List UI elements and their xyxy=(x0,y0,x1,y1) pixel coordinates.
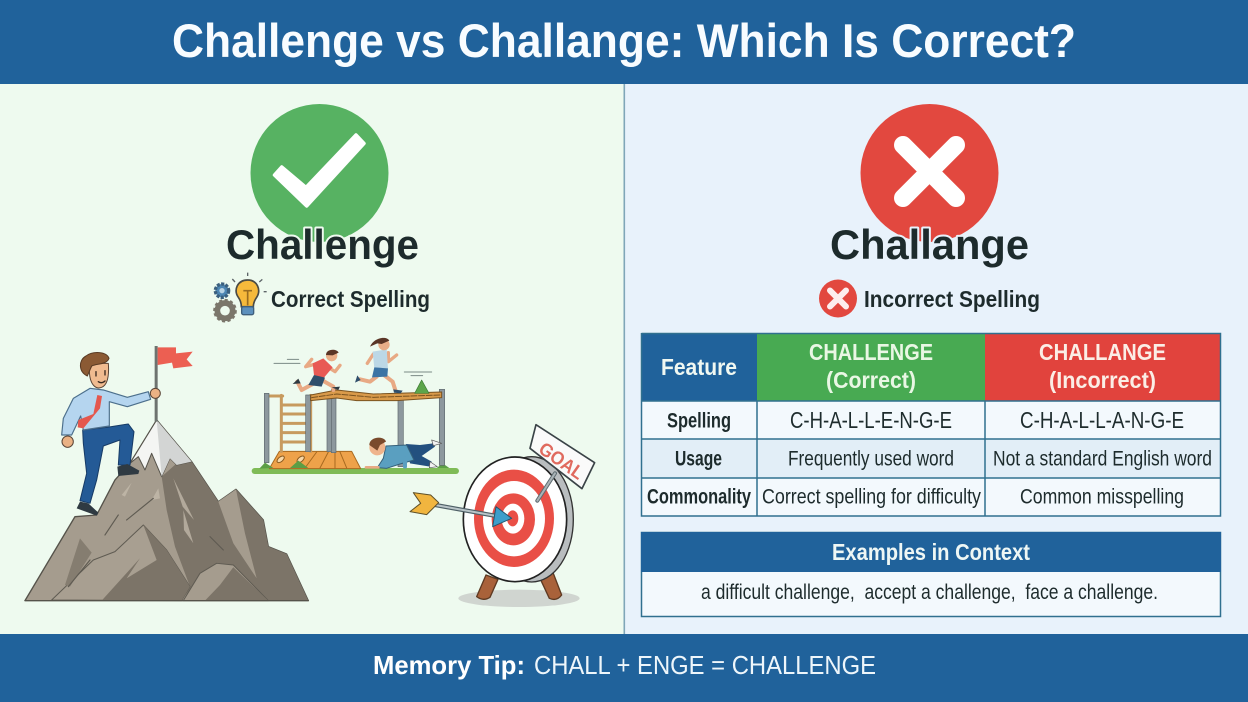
runner 2 xyxy=(355,338,403,393)
panel: examples in context xyxy=(641,532,1221,616)
table row: Spelling: C-H-A-L-L-E-N-G-E xyxy=(790,407,952,433)
table header: Challenge correct xyxy=(757,333,985,401)
target xyxy=(490,457,573,582)
head xyxy=(89,363,109,388)
ramp xyxy=(269,451,361,469)
ladder xyxy=(269,395,311,451)
flag xyxy=(155,346,193,422)
comparison table xyxy=(641,333,1220,516)
ground xyxy=(252,468,459,474)
table header: Challenge correct: CHALLENGE xyxy=(809,339,933,365)
panel: examples in context: Examples in Context xyxy=(832,539,1030,565)
table row: Commonality: Commonality xyxy=(647,486,751,508)
runner 1 xyxy=(293,350,340,390)
table header: Challange incorrect: CHALLANGE xyxy=(1039,339,1166,365)
table header: Challenge correct: (Correct) xyxy=(826,367,916,393)
crawling man xyxy=(366,438,442,468)
icon: red cross circle xyxy=(860,104,998,242)
table row: Usage: Frequently used word xyxy=(788,448,954,470)
trousers xyxy=(80,424,134,503)
illustration: obstacle course xyxy=(252,338,459,474)
goal sign xyxy=(530,425,595,489)
legs xyxy=(477,575,498,599)
shoes xyxy=(77,464,139,516)
illustration: mountain xyxy=(25,420,308,601)
table row: Spelling: Spelling xyxy=(667,410,731,432)
footer memory tip xyxy=(0,634,1248,702)
icon: gears and light bulb xyxy=(215,273,267,321)
panel: right incorrect background xyxy=(625,84,1248,634)
table row: Commonality: Common misspelling xyxy=(1020,486,1184,508)
arrow xyxy=(410,493,512,527)
heading: Challange: Challange xyxy=(830,221,1029,268)
label: Incorrect Spelling: Incorrect Spelling xyxy=(864,286,1040,312)
table row: Usage xyxy=(641,439,1220,478)
table row: Usage: Usage xyxy=(675,448,722,470)
panel: examples in context: a difficult challenge, accept a challenge, face a challenge. xyxy=(701,581,1158,604)
table row: Commonality: Correct spelling for difficulty xyxy=(762,486,981,508)
table header: Challange incorrect: (Incorrect) xyxy=(1049,367,1156,393)
hands xyxy=(62,388,160,447)
footer memory tip: Memory Tip: xyxy=(373,650,525,680)
heading: Challenge: Challenge xyxy=(226,221,419,268)
cone xyxy=(415,380,429,393)
icon: small red cross xyxy=(819,280,857,318)
table header: Feature xyxy=(641,333,757,401)
title banner xyxy=(0,0,1248,84)
illustration: target with arrow and goal sign xyxy=(410,425,595,607)
goal sign: GOAL xyxy=(535,438,588,484)
title banner: Challenge vs Challange: Which Is Correct? xyxy=(172,14,1076,67)
table row: Spelling xyxy=(641,401,1220,439)
tie xyxy=(78,395,102,428)
footer memory tip: CHALL + ENGE = CHALLENGE xyxy=(534,650,876,680)
table row: Commonality xyxy=(641,478,1220,516)
snow cap xyxy=(130,420,192,477)
panel: left correct background xyxy=(0,84,624,634)
table header: Feature: Feature xyxy=(661,354,737,380)
icon: green check circle xyxy=(250,104,388,242)
rope bridge xyxy=(311,390,442,401)
speed lines xyxy=(274,359,432,376)
shadow xyxy=(458,590,580,607)
shirt xyxy=(62,388,151,435)
table header: Challange incorrect xyxy=(985,333,1220,401)
table row: Spelling: C-H-A-L-L-A-N-G-E xyxy=(1020,407,1184,433)
illustration: man climbing with flag xyxy=(62,346,193,516)
posts xyxy=(264,389,445,467)
label: Correct Spelling: Correct Spelling xyxy=(271,286,430,312)
sign post xyxy=(537,473,555,501)
